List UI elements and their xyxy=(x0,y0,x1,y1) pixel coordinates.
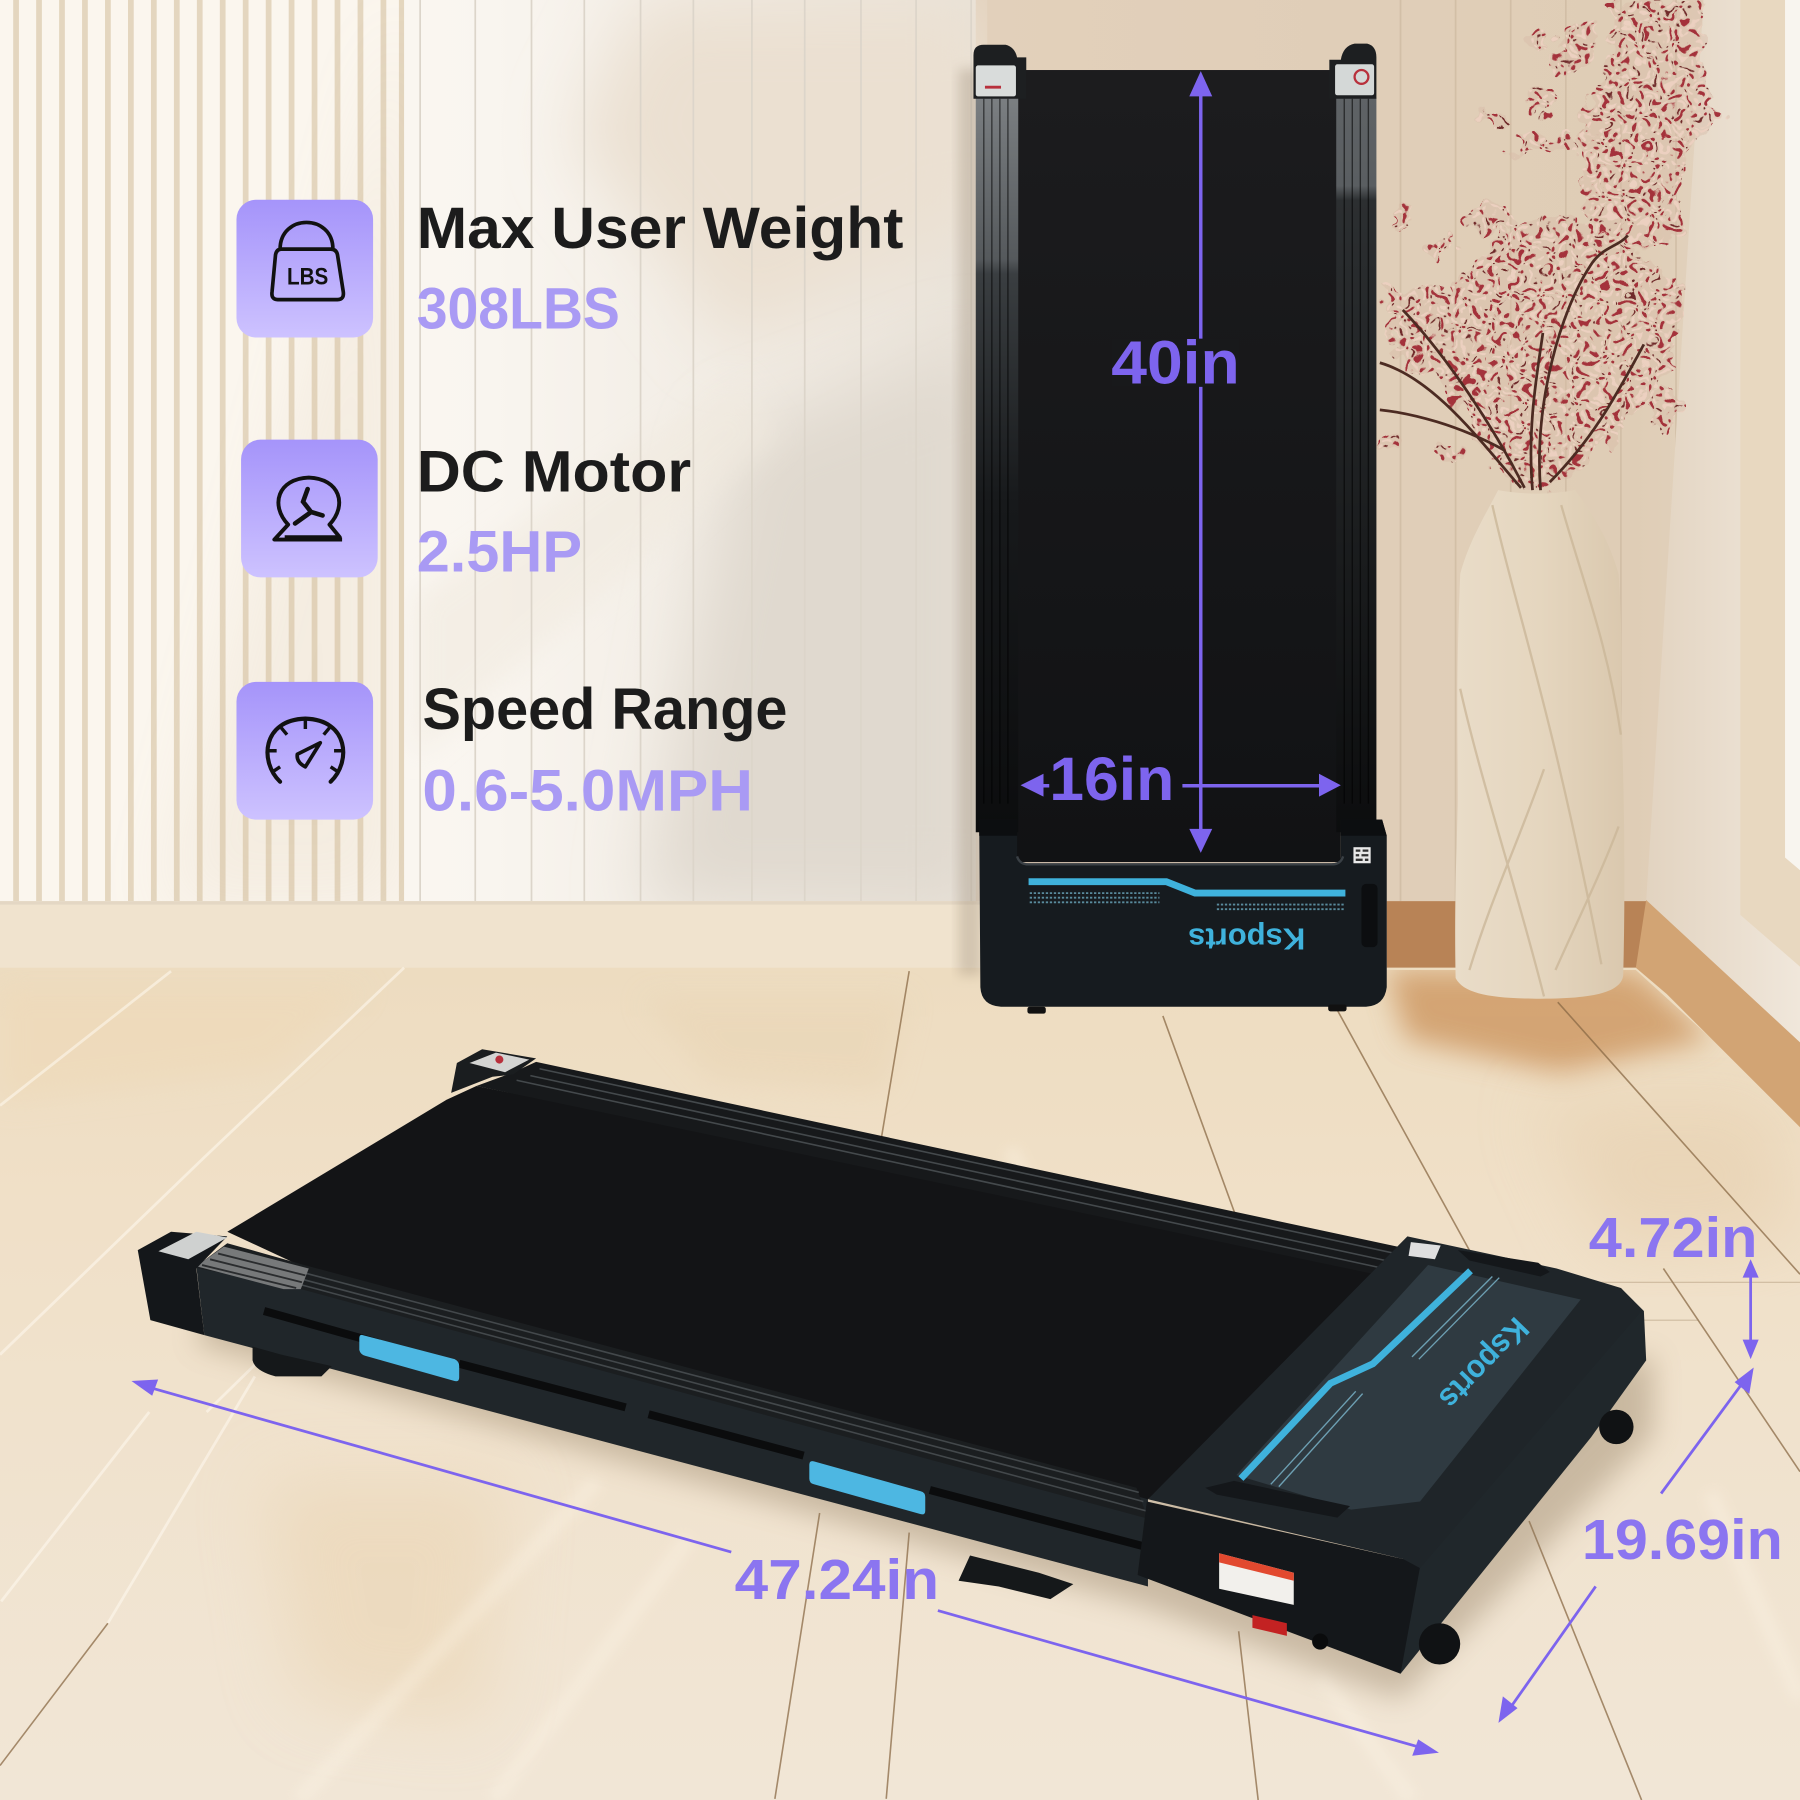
arrow xyxy=(1743,1259,1759,1359)
brand: Ksports xyxy=(1432,1311,1536,1417)
handle slot xyxy=(1361,884,1378,947)
warning stickers xyxy=(976,65,1016,96)
dimension: 40in length: 40in xyxy=(1111,328,1240,396)
dimension: 4.72in height xyxy=(1589,1206,1759,1359)
floor shadow xyxy=(195,1263,1653,1699)
value xyxy=(1111,339,1240,387)
near rail xyxy=(196,1243,1148,1519)
base unit xyxy=(979,820,1387,1007)
feet xyxy=(1027,1007,1046,1014)
floor xyxy=(0,968,1800,1800)
near sticker xyxy=(158,1232,227,1259)
value: 47.24in xyxy=(735,1548,939,1611)
icon tile: gauge xyxy=(236,682,373,820)
dimension: 16in width xyxy=(1021,745,1341,813)
window frame xyxy=(1740,0,1800,967)
value: 308LBS xyxy=(417,276,620,341)
label: DC Motor xyxy=(417,439,691,504)
belt surface xyxy=(227,1086,1419,1499)
side body xyxy=(196,1266,1148,1586)
brand upside down: Ksports xyxy=(1188,922,1305,957)
arrow right xyxy=(1182,774,1341,797)
far rail xyxy=(476,1062,1419,1277)
blue pad one xyxy=(359,1335,459,1381)
top QR xyxy=(1409,1242,1441,1259)
label: Max User Weight xyxy=(417,196,903,261)
icon tile: motor xyxy=(241,440,378,577)
blue stripe xyxy=(1029,882,1345,893)
flower branches xyxy=(1380,0,1722,490)
spec: speed range xyxy=(236,677,787,823)
spec: max user weight xyxy=(236,196,903,341)
adjustable foot middle xyxy=(959,1555,1073,1599)
arrow left xyxy=(1021,774,1049,797)
adjustable foot left xyxy=(253,1347,332,1376)
right wall xyxy=(976,0,1800,976)
spec: DC motor xyxy=(241,439,691,585)
near end cap xyxy=(138,1232,227,1335)
slatted wall xyxy=(0,0,404,907)
head front xyxy=(1138,1502,1420,1674)
wall shadow xyxy=(959,69,982,976)
head side xyxy=(1401,1288,1646,1674)
QR code xyxy=(1353,847,1371,863)
right corner wall xyxy=(1646,0,1800,1045)
dimension: 40in length xyxy=(1111,71,1240,853)
top panel xyxy=(1236,1265,1581,1510)
standing treadmill xyxy=(959,44,1387,1014)
far sticker xyxy=(470,1053,529,1072)
power switch xyxy=(1252,1615,1287,1636)
blue pad two xyxy=(809,1461,925,1514)
arrow left part xyxy=(135,1381,731,1552)
panelled wall xyxy=(0,0,987,907)
icon tile: weight xyxy=(236,200,373,338)
flat treadmill xyxy=(138,1049,1653,1699)
head top xyxy=(1148,1236,1642,1568)
top caps xyxy=(973,45,1026,99)
value: 4.72in xyxy=(1589,1206,1758,1269)
grooved silver section xyxy=(196,1247,309,1289)
floor planks xyxy=(0,971,1800,1800)
arrow right part xyxy=(938,1611,1435,1754)
value: 19.69in xyxy=(1582,1508,1783,1571)
warning label xyxy=(1219,1553,1294,1605)
left rail xyxy=(976,98,1018,832)
arrow upper part xyxy=(1661,1371,1752,1493)
handle recess xyxy=(1458,1250,1550,1277)
value: 16in xyxy=(1049,745,1174,813)
blue stripe xyxy=(1241,1271,1471,1479)
value: 0.6-5.0MPH xyxy=(422,758,753,823)
far end cap xyxy=(451,1049,536,1093)
belt xyxy=(1016,70,1341,862)
arrow lower part xyxy=(1500,1586,1596,1720)
icon tile: weight: LBS xyxy=(287,264,328,291)
right rail xyxy=(1336,98,1376,832)
wheels xyxy=(1599,1410,1634,1444)
window xyxy=(1785,0,1800,870)
vase xyxy=(1455,490,1624,999)
dimension: 47.24in length xyxy=(135,1381,1435,1754)
diagonal baseboard xyxy=(1636,900,1800,1127)
blossom clusters xyxy=(1381,0,1722,488)
label: Speed Range xyxy=(422,677,788,742)
value: 2.5HP xyxy=(417,520,582,585)
arrow xyxy=(1189,71,1212,853)
baseboard xyxy=(0,901,987,970)
dimension: 19.69in width xyxy=(1500,1371,1783,1720)
